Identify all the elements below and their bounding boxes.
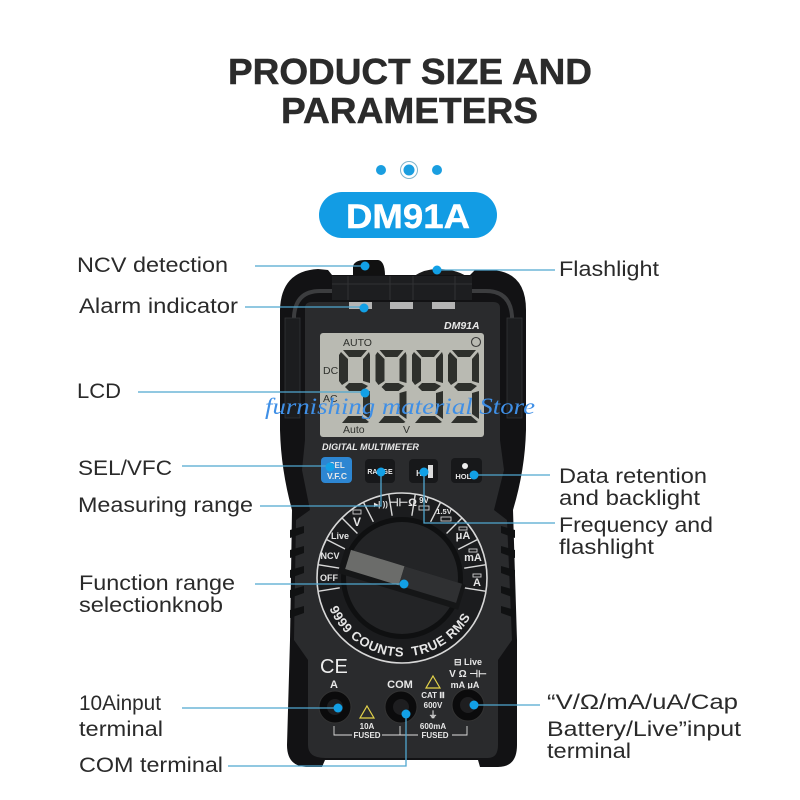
dial labels: ⊣⊢Ω bbox=[389, 496, 417, 509]
device name: DIGITAL MULTIMETER bbox=[322, 442, 419, 453]
front face bbox=[294, 302, 512, 758]
LCD screen: DC bbox=[323, 365, 339, 377]
right labels: Data retention bbox=[559, 464, 707, 488]
left labels: terminal bbox=[79, 717, 163, 741]
knob pointer bbox=[338, 548, 466, 610]
model badge bbox=[319, 192, 497, 238]
button flashlight: H bbox=[416, 469, 422, 478]
NCV sensor bump bbox=[353, 260, 385, 276]
right labels: terminal bbox=[547, 739, 631, 763]
button HOLD: HOLD bbox=[455, 472, 477, 481]
terminal labels bbox=[330, 657, 487, 740]
dial tick marks bbox=[318, 494, 486, 591]
dial labels: V bbox=[353, 515, 361, 529]
button SEL: SEL bbox=[329, 461, 345, 470]
button RANGE: RANGE bbox=[367, 469, 393, 476]
LCD screen: V bbox=[403, 424, 410, 436]
title: PARAMETERS bbox=[281, 90, 538, 131]
fuse brackets bbox=[334, 726, 467, 735]
model label: DM91A bbox=[444, 320, 480, 332]
LCD screen: AUTO bbox=[343, 337, 372, 349]
terminal labels: ⏚ bbox=[428, 710, 438, 720]
terminal labels: CAT Ⅲ bbox=[421, 691, 445, 700]
terminal labels: V Ω ⊣⊢ bbox=[449, 669, 487, 680]
button SEL bbox=[321, 457, 352, 483]
terminal labels: FUSED bbox=[353, 731, 381, 740]
terminal labels: mA μA bbox=[451, 680, 480, 690]
terminal labels: A bbox=[330, 679, 338, 691]
alarm indicator lights bbox=[349, 302, 455, 309]
right labels: Battery/Live”input bbox=[547, 717, 741, 741]
power icon bbox=[472, 338, 480, 346]
left labels: SEL/VFC bbox=[78, 456, 172, 480]
rotary dial bbox=[316, 492, 488, 664]
left labels bbox=[77, 253, 253, 777]
terminal labels: 600mA bbox=[420, 722, 446, 731]
button SEL: V.F.C bbox=[327, 471, 347, 481]
flashlight bump bbox=[414, 269, 466, 276]
rubber bumper bbox=[280, 269, 526, 767]
bumper inner rim bbox=[294, 291, 512, 335]
warning triangles bbox=[360, 676, 440, 718]
dial labels: mA bbox=[464, 552, 482, 564]
decorative dots bbox=[376, 162, 442, 178]
left labels: Alarm indicator bbox=[79, 294, 238, 318]
digits 9999 bbox=[339, 350, 479, 423]
dial labels: OFF bbox=[320, 573, 338, 583]
right labels: flashlight bbox=[559, 535, 654, 559]
left labels: LCD bbox=[77, 379, 121, 403]
callout dots bbox=[326, 262, 478, 718]
right labels bbox=[547, 257, 741, 763]
LCD screen bbox=[320, 333, 484, 437]
dial labels: ▸| )) bbox=[373, 500, 388, 509]
terminal labels: 10A bbox=[360, 722, 375, 731]
input terminals bbox=[319, 689, 484, 723]
button RANGE bbox=[365, 459, 395, 483]
curved scale text: 9999 COUNTS TRUE RMS bbox=[330, 606, 470, 656]
battery icons bbox=[353, 506, 481, 577]
dial labels: NCV bbox=[320, 551, 340, 561]
terminal labels: ⊟ Live bbox=[454, 657, 482, 667]
model badge: DM91A bbox=[346, 198, 470, 236]
right labels: and backlight bbox=[559, 486, 700, 510]
left labels: Measuring range bbox=[78, 493, 253, 517]
right labels: Frequency and bbox=[559, 513, 713, 537]
left labels: 10Ainput bbox=[79, 691, 161, 715]
top bracket bbox=[332, 276, 472, 300]
dial labels: A bbox=[473, 577, 481, 589]
terminal labels: COM bbox=[387, 679, 413, 691]
dial labels: μA bbox=[456, 530, 470, 542]
dial labels: 1.5V bbox=[436, 507, 452, 516]
multimeter device bbox=[280, 260, 526, 767]
terminal labels: FUSED bbox=[421, 731, 449, 740]
LCD screen: Auto bbox=[343, 424, 365, 436]
LCD screen: AC bbox=[323, 393, 338, 405]
left labels: Function range bbox=[79, 571, 235, 595]
dial labels bbox=[320, 496, 482, 589]
callout lines bbox=[138, 266, 555, 766]
title: PRODUCT SIZE AND bbox=[228, 51, 592, 92]
CE mark: CE bbox=[320, 656, 348, 678]
side slots bbox=[285, 318, 522, 418]
knob bbox=[341, 517, 463, 639]
watermark: furnishing material Store bbox=[265, 394, 535, 419]
dial labels: Live bbox=[331, 531, 349, 541]
button flashlight bbox=[409, 459, 438, 483]
left labels: COM terminal bbox=[79, 753, 223, 777]
terminal labels: 600V bbox=[424, 701, 443, 710]
title bbox=[228, 51, 592, 131]
left labels: NCV detection bbox=[77, 253, 228, 277]
right labels: Flashlight bbox=[559, 257, 659, 281]
dial labels: 9V bbox=[419, 496, 430, 505]
side grips bbox=[290, 526, 515, 618]
button HOLD bbox=[451, 458, 482, 483]
left labels: selectionknob bbox=[79, 593, 223, 617]
right labels: “V/Ω/mA/uA/Cap bbox=[547, 690, 738, 714]
